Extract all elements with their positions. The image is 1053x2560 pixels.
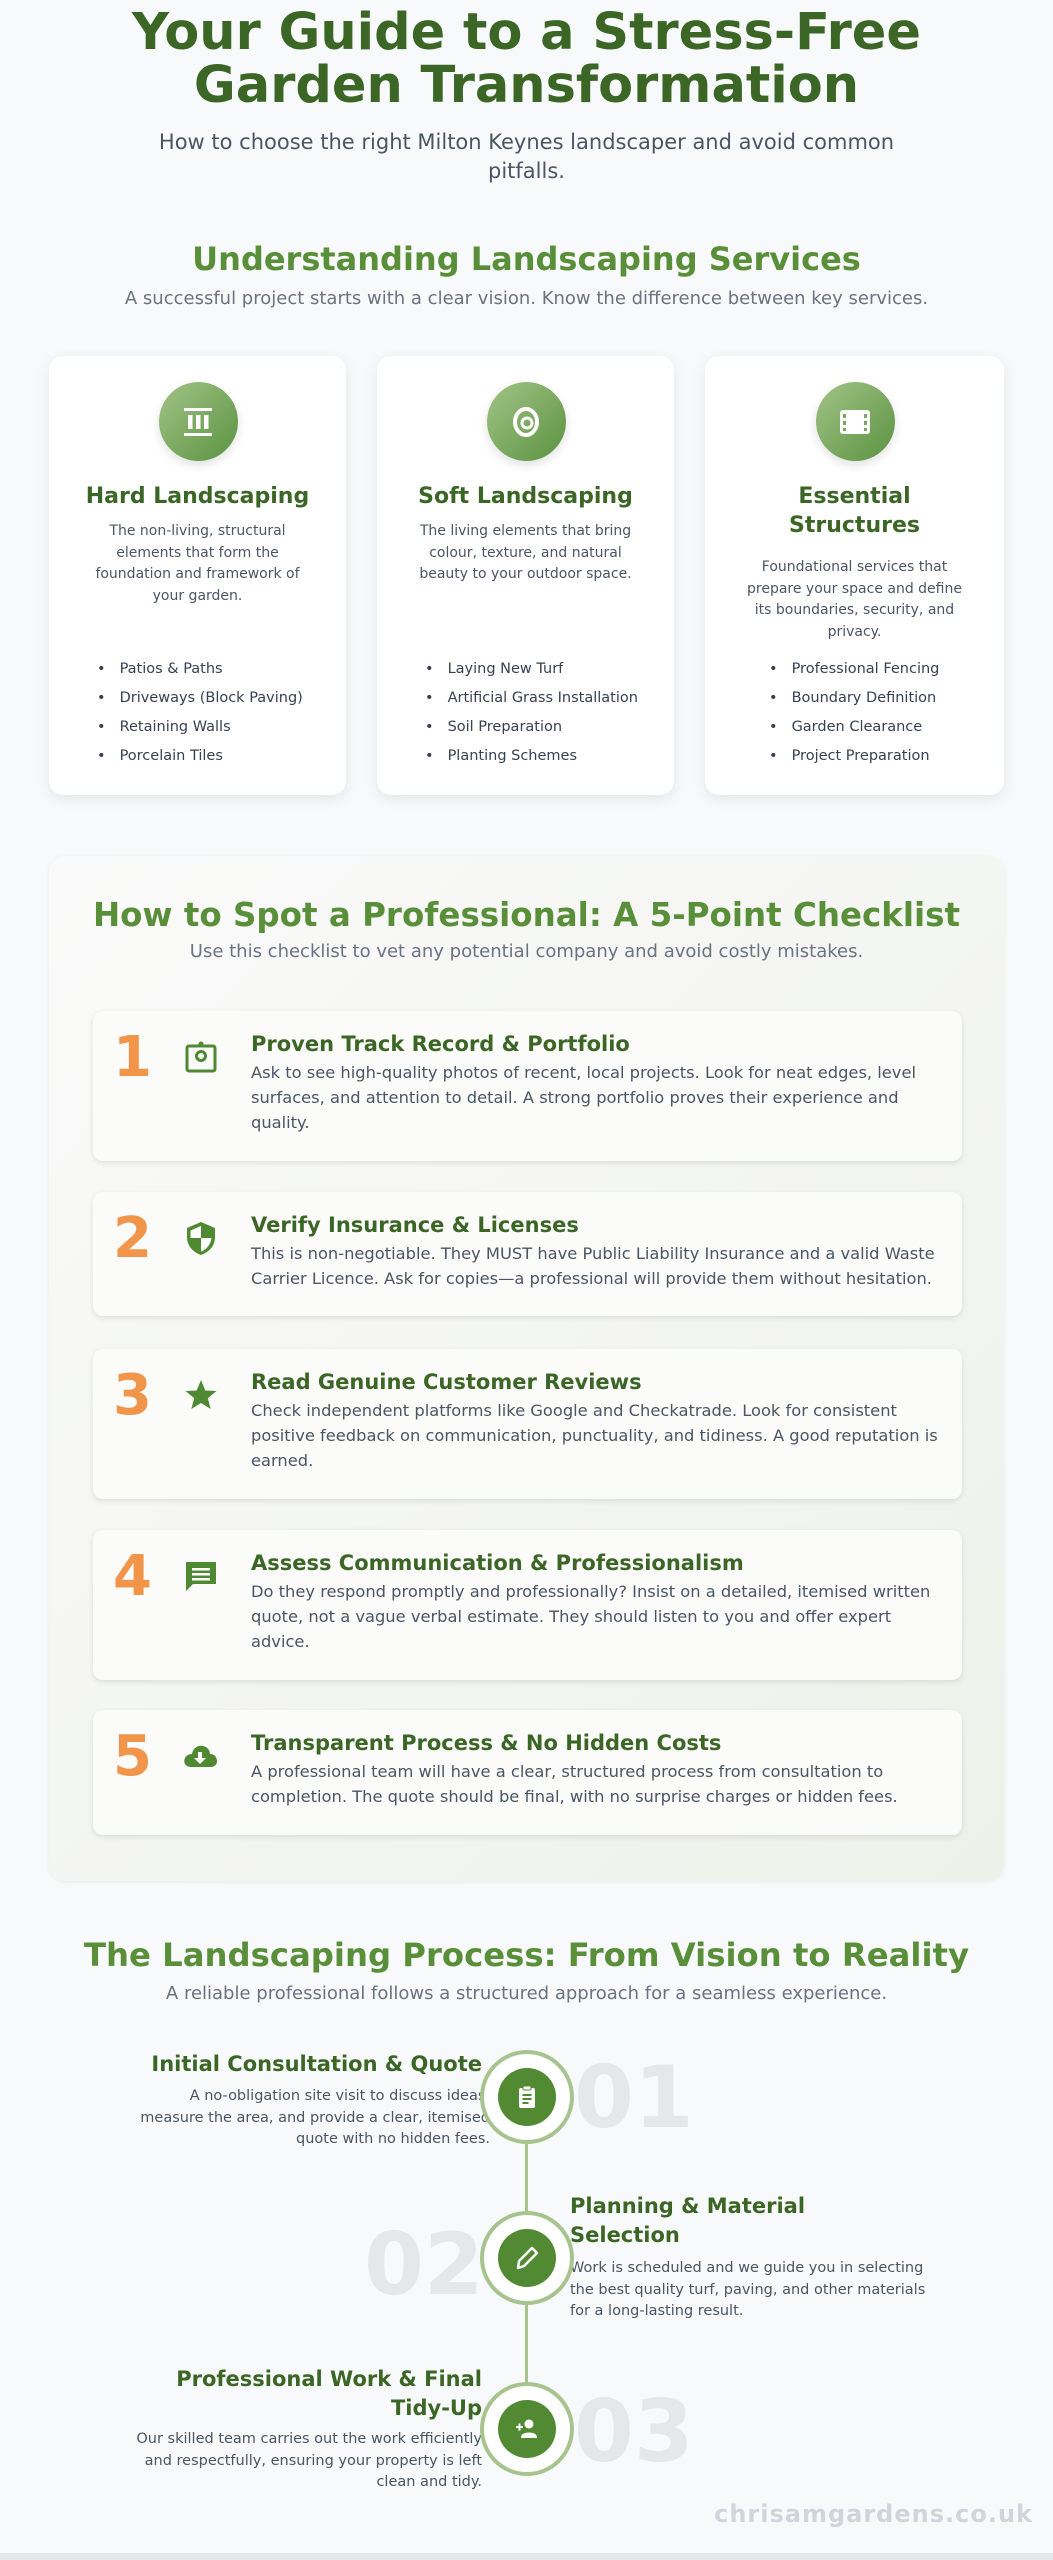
title: Your Guide to a Stress-Free: [132, 3, 921, 62]
card description: The non-living, structural elements that form the foundation and framework of your garden.: [95, 523, 300, 604]
card list: Porcelain Tiles: [120, 748, 223, 764]
title: Garden Transformation: [194, 56, 859, 115]
card: essential structures: [705, 356, 1004, 795]
checklist item 5: A professional team will have a clear, structured process from consultation to completion. The quote should be final, with no surprise charges or hidden fees.: [251, 1762, 898, 1806]
checklist heading: How to Spot a Professional: A 5-Point Checklist: [93, 896, 960, 934]
icon: pencil: [480, 2211, 574, 2305]
checklist item 2: [93, 1192, 962, 1316]
card list: Professional Fencing: [792, 661, 939, 677]
panel: checklist: [49, 856, 1004, 1881]
title: [132, 3, 921, 115]
checklist item 3: Read Genuine Customer Reviews: [251, 1370, 642, 1394]
icon: star: [186, 1380, 216, 1409]
step title: Professional Work & Final Tidy-Up: [176, 2367, 482, 2420]
checklist item 5: 5: [113, 1724, 152, 1789]
checklist item 2: This is non-negotiable. They MUST have Public Liability Insurance and a valid Waste Carrier Licence. Ask for copies—a professional will provide them without hesitation.: [251, 1244, 935, 1288]
timeline step 2: [364, 2194, 925, 2319]
card list: Laying New Turf: [448, 661, 563, 677]
icon: chat bubble: [186, 1562, 216, 1591]
card title: [789, 484, 920, 538]
timeline step 3: [136, 2367, 694, 2490]
checklist item 3: 3: [113, 1363, 152, 1428]
checklist item 5: Transparent Process & No Hidden Costs: [251, 1731, 721, 1755]
big number 02: 02: [364, 2215, 484, 2315]
card list: Patios & Paths: [120, 661, 223, 677]
checklist item 4: Do they respond promptly and professionally? Insist on a detailed, itemised written quote, not a vague verbal estimate. They should listen to you and offer expert advice.: [251, 1582, 930, 1651]
checklist item 4: Assess Communication & Professionalism: [251, 1551, 744, 1575]
icon: pillar: [158, 382, 238, 461]
card: hard landscaping: [49, 356, 346, 795]
step title: Initial Consultation & Quote: [151, 2052, 482, 2076]
step description: A no-obligation site visit to discuss ideas, measure the area, and provide a clear, itemised quote with no hidden fees.: [140, 2088, 490, 2147]
icon: add person: [480, 2382, 574, 2476]
card title: Soft Landscaping: [418, 484, 633, 509]
icon: portfolio badge: [186, 1042, 216, 1072]
step title: Planning & Material Selection: [570, 2194, 805, 2247]
checklist item 1: Proven Track Record & Portfolio: [251, 1032, 630, 1056]
card list: Driveways (Block Paving): [120, 690, 303, 706]
big number 03: 03: [574, 2382, 694, 2482]
big number 01: 01: [574, 2048, 694, 2148]
card list: Project Preparation: [792, 748, 930, 764]
card list: [427, 661, 638, 764]
card: soft landscaping: [377, 356, 674, 795]
icon: film/frame: [816, 382, 894, 461]
card list: Garden Clearance: [792, 719, 922, 735]
timeline connector line: [525, 2100, 528, 2430]
timeline step 1: [140, 2048, 694, 2148]
icon: shield: [187, 1222, 215, 1255]
checklist item 1: [93, 1011, 962, 1161]
footer: website: chrisamgardens.co.uk: [714, 2500, 1033, 2528]
card title: Essential: [798, 484, 911, 509]
card list: [99, 661, 303, 764]
card title: Hard Landscaping: [86, 484, 309, 509]
checklist item 1: Ask to see high-quality photos of recent, local projects. Look for neat edges, level surfaces, and attention to detail. A strong portfolio proves their experience and quality.: [251, 1063, 916, 1132]
checklist item 4: 4: [113, 1544, 152, 1609]
step description: Our skilled team carries out the work efficiently and respectfully, ensuring your property is left clean and tidy.: [136, 2431, 482, 2490]
card list: [771, 661, 939, 764]
checklist item 3: Check independent platforms like Google and Checkatrade. Look for consistent positive feedback on communication, punctuality, and tidiness. A good reputation is earned.: [251, 1401, 938, 1470]
checklist item 1: 1: [113, 1025, 152, 1090]
card list: Boundary Definition: [792, 690, 936, 706]
step description: Work is scheduled and we guide you in selecting the best quality turf, paving, and other materials for a long-lasting result.: [570, 2260, 925, 2319]
card list: Retaining Walls: [120, 719, 231, 735]
card list: Artificial Grass Installation: [448, 690, 638, 706]
section subtitle: services: A successful project starts with a clear vision. Know the difference between key services.: [125, 288, 928, 309]
card title: Structures: [789, 513, 920, 538]
card list: Planting Schemes: [448, 748, 577, 764]
subtitle: How to choose the right Milton Keynes landscaper and avoid common pitfalls.: [159, 130, 894, 183]
checklist item 4: [93, 1530, 962, 1680]
section heading: process: The Landscaping Process: From Vision to Reality: [84, 1936, 969, 1974]
checklist item 2: Verify Insurance & Licenses: [251, 1213, 579, 1237]
icon: clipboard: [480, 2050, 574, 2144]
checklist subtitle: Use this checklist to vet any potential company and avoid costly mistakes.: [190, 941, 863, 962]
icon: swirl: [486, 382, 566, 461]
section subtitle: process: A reliable professional follows a structured approach for a seamless experience.: [166, 1983, 887, 2004]
checklist item 2: 2: [113, 1206, 152, 1271]
section heading: services: Understanding Landscaping Services: [192, 240, 861, 278]
card description: Foundational services that prepare your space and define its boundaries, security, and privacy.: [747, 559, 962, 640]
card list: Soil Preparation: [448, 719, 562, 735]
checklist item 3: [93, 1349, 962, 1499]
icon: cloud download: [184, 1746, 217, 1767]
card description: The living elements that bring colour, texture, and natural beauty to your outdoor space.: [419, 523, 632, 582]
checklist item 5: [93, 1710, 962, 1835]
